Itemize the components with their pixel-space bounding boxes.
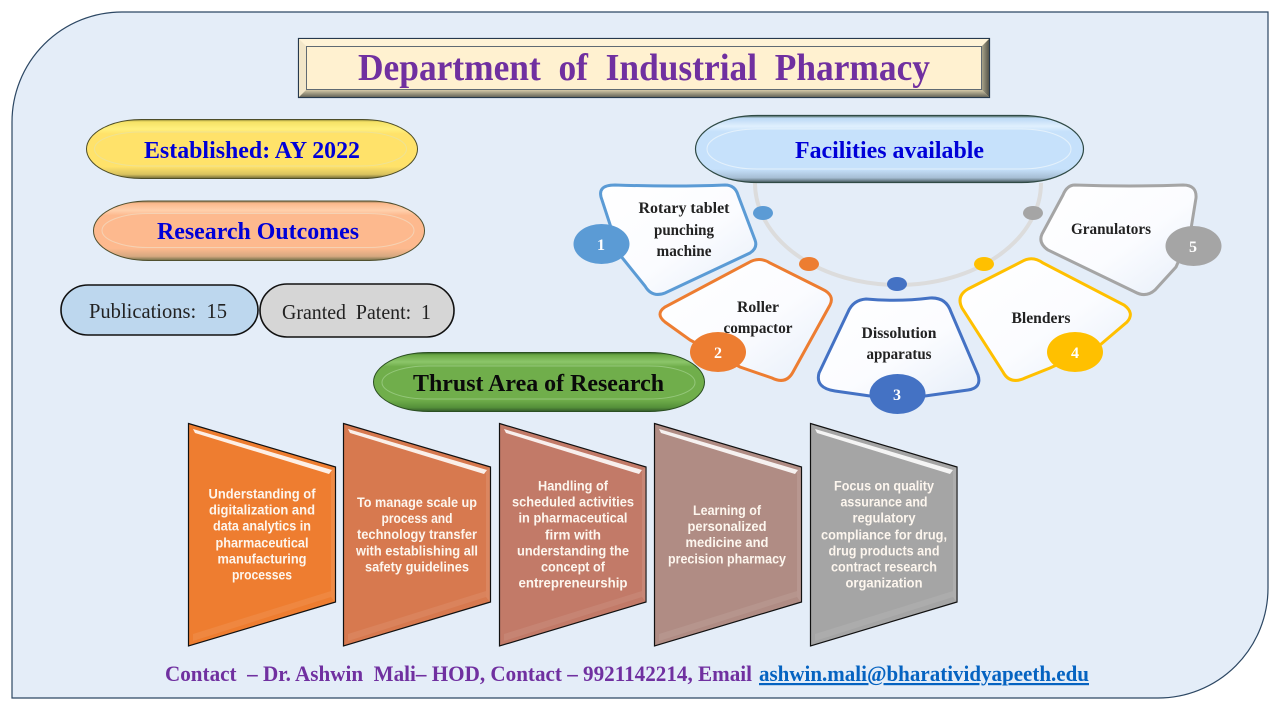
thrust card 5: contract research — [831, 560, 937, 574]
contact line — [165, 661, 1089, 686]
pill: established — [86, 120, 418, 178]
thrust card 2 — [344, 424, 490, 646]
pill: thrust area of research — [374, 352, 704, 412]
thrust card 1: data analytics in — [213, 518, 311, 534]
pill: thrust area of research: Thrust Area of Research — [413, 370, 664, 397]
thrust card 3: in pharmaceutical — [518, 510, 628, 526]
thrust card 5: assurance and — [840, 494, 928, 510]
thrust card 3: Handling of — [538, 478, 608, 494]
thrust card 1 — [188, 424, 336, 646]
thrust card 3: concept of — [541, 560, 605, 574]
thrust card 2: safety guidelines — [365, 560, 469, 574]
pill: research outcomes: Research Outcomes — [157, 219, 359, 245]
pill: established: Established: AY 2022 — [144, 138, 360, 164]
thrust card 1: Understanding of — [208, 486, 316, 502]
facility 4: blenders — [960, 257, 1130, 380]
thrust card 4 — [654, 424, 802, 646]
facility 1: rotary tablet punching machine: 1 — [597, 237, 605, 254]
thrust card 5: drug products and — [828, 544, 940, 558]
thrust card 1: digitalization and — [209, 502, 315, 518]
thrust card 3: understanding the — [517, 544, 629, 558]
facility 1: rotary tablet punching machine: Rotary tablet — [638, 200, 730, 217]
title banner — [298, 38, 990, 98]
facility 1: rotary tablet punching machine: punching — [654, 222, 714, 239]
thrust card 5: organization — [846, 576, 922, 590]
thrust card 3: scheduled activities — [512, 494, 634, 510]
pill: granted patent: Granted Patent: 1 — [282, 300, 431, 324]
facility 2: roller compactor: 2 — [714, 345, 722, 362]
pill: facilities available: Facilities available — [795, 138, 984, 164]
facility 3: dissolution apparatus: Dissolution — [862, 325, 937, 342]
facility 3: dissolution apparatus: 3 — [893, 387, 901, 404]
facility 2: roller compactor: compactor — [724, 320, 793, 337]
pill: facilities available — [696, 116, 1084, 182]
facility 4: blenders: Blenders — [1012, 310, 1070, 327]
facility 2: roller compactor — [660, 257, 831, 380]
facility 5: granulators: 5 — [1189, 239, 1197, 256]
facility 1: rotary tablet punching machine: machine — [656, 243, 712, 260]
thrust card 1: manufacturing — [218, 552, 306, 566]
thrust card 3: firm with — [545, 528, 601, 542]
thrust card 5: regulatory — [852, 510, 916, 526]
thrust card 4: Learning of — [693, 503, 761, 518]
facility 2: roller compactor: Roller — [737, 299, 779, 316]
pill: research outcomes — [94, 201, 424, 260]
facility 1: rotary tablet punching machine — [574, 185, 773, 294]
pill: publications — [61, 285, 258, 335]
facility 3: dissolution apparatus — [818, 277, 979, 414]
facility 3: dissolution apparatus: apparatus — [866, 346, 932, 363]
thrust card 2: technology transfer — [357, 527, 478, 542]
arc connector — [755, 183, 1041, 285]
thrust card 4: personalized — [688, 519, 766, 534]
facility 5: granulators — [1023, 185, 1222, 295]
thrust card 1: pharmaceutical — [216, 536, 308, 550]
thrust card 4: medicine and — [686, 535, 768, 550]
thrust card 5 — [810, 424, 957, 646]
facility 4: blenders: 4 — [1071, 345, 1079, 362]
pill: publications: Publications: 15 — [89, 299, 227, 323]
thrust card 5: compliance for drug, — [821, 528, 947, 542]
thrust card 3 — [500, 424, 646, 646]
thrust card 2: with establishing all — [355, 544, 478, 558]
thrust card 3: entrepreneurship — [518, 576, 628, 590]
thrust card 2: process and — [382, 511, 452, 526]
contact line: Contact – Dr. Ashwin Mali– HOD, Contact – 9921142214, Email — [165, 661, 752, 686]
thrust card 2: To manage scale up — [357, 495, 477, 510]
thrust card 5: Focus on quality — [834, 478, 934, 494]
thrust card 1: processes — [232, 568, 292, 582]
pill: granted patent — [260, 284, 454, 337]
facility 5: granulators: Granulators — [1071, 221, 1151, 238]
contact line: ashwin.mali@bharatividyapeeth.edu — [759, 661, 1089, 686]
thrust card 4: precision pharmacy — [668, 552, 786, 566]
title text: Department of Industrial Pharmacy — [358, 47, 930, 89]
